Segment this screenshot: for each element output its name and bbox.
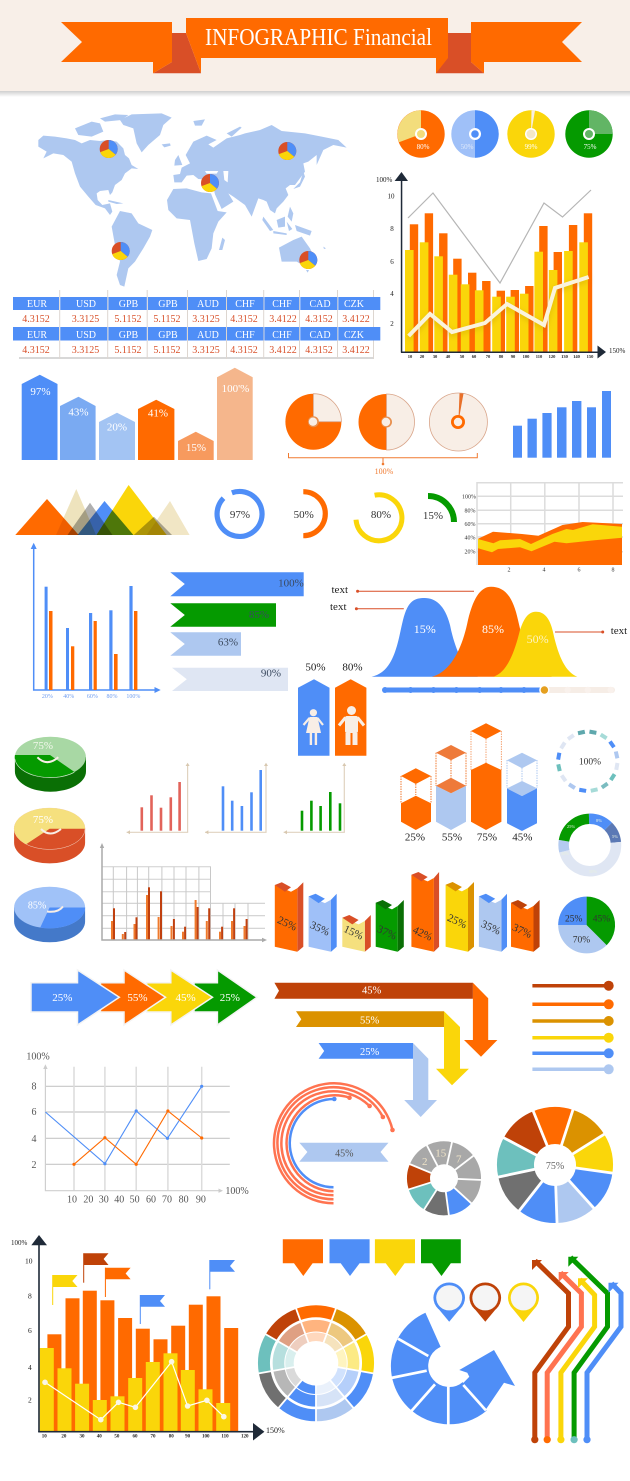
orange hump (432, 587, 552, 677)
arrow percentage columns (22, 368, 253, 460)
pie two (358, 394, 414, 450)
map pie: Asia (278, 142, 296, 160)
currency table (13, 290, 380, 359)
column 100%: 100'% (222, 383, 249, 395)
small segmented wheel (407, 1141, 482, 1216)
flag yellow (52, 1275, 78, 1305)
arrow green (194, 970, 257, 1025)
bell curves: 50% (527, 632, 549, 646)
area chart: 2 (508, 568, 510, 574)
hexagon columns (401, 723, 537, 844)
table data row 2: 4.3152 (22, 345, 50, 356)
table header row 2: USD (76, 330, 96, 341)
large segmented wheel (496, 1108, 614, 1225)
axis labels: 100% (376, 176, 392, 184)
flag orange (105, 1268, 131, 1297)
table data row 2: 3.4122 (269, 345, 297, 356)
axis labels (376, 176, 626, 355)
bar and line chart: 140 (573, 354, 581, 359)
column 15%: 15% (186, 442, 206, 454)
pie 99% (507, 110, 555, 158)
bottom bar chart with flags: 30 (80, 1434, 85, 1439)
bottom chart labels: 10 (25, 1256, 33, 1266)
pie 80%: 80% (417, 143, 430, 151)
table data row 1: 4.3152 (305, 314, 333, 325)
banner ribbon (61, 18, 582, 73)
area chart (462, 483, 623, 574)
3D pie red: 75% (33, 814, 53, 826)
pie 75% (565, 110, 613, 158)
bottom bar chart with flags: 60 (132, 1434, 138, 1439)
bottom bar chart with flags: 10 (42, 1434, 47, 1439)
donut chart: 10% (561, 851, 569, 856)
bar and line chart: 110 (536, 354, 543, 359)
table data row 1: 3.4122 (342, 314, 370, 325)
bottom chart labels: 2 (28, 1396, 32, 1404)
bell curves: 15% (414, 622, 436, 636)
ribbon 90%: 90% (261, 668, 281, 680)
line chart labels: 70 (162, 1194, 172, 1205)
table header row 2: GPB (119, 330, 139, 341)
bar and line chart: 90 (511, 354, 516, 359)
table data row 2: 5.1152 (153, 345, 181, 356)
line chart labels: 40 (114, 1194, 124, 1205)
legend lines with dots (532, 981, 614, 1074)
white trend line (409, 277, 589, 336)
flag dark red (83, 1253, 108, 1283)
line chart labels: 8 (32, 1082, 36, 1092)
table data row 2: 4.3152 (305, 345, 333, 356)
bottom bar chart with flags: 90 (185, 1434, 191, 1439)
column 55%: 55% (442, 832, 462, 844)
table data row 1: 3.3125 (72, 314, 99, 325)
line chart labels: 100% (225, 1186, 249, 1197)
area chart labels (462, 494, 476, 556)
gender tags (298, 662, 366, 756)
dashed ring 100%: 100% (579, 758, 601, 768)
table header row 2: CHF (235, 330, 255, 341)
small pie chart (558, 897, 615, 953)
top percent pies (397, 110, 613, 158)
bracket (288, 453, 477, 464)
wheel numbers: 15 (435, 1148, 447, 1160)
table data row 1: 3.3125 (192, 314, 220, 325)
column 97%: 97% (30, 386, 51, 398)
grid chart bars (111, 895, 246, 940)
bar and line chart: 150 (587, 354, 594, 359)
3D pie blue: 85% (28, 901, 46, 912)
bent arrow 55%: 55% (360, 1016, 379, 1026)
column 97% (22, 375, 58, 460)
table data row 2 (22, 345, 370, 356)
area chart: 8 (612, 568, 614, 574)
table header row 2: AUD (197, 330, 219, 341)
bottom bar chart with flags: 80 (169, 1434, 174, 1439)
small bar chart green (284, 763, 346, 834)
line chart (26, 1051, 249, 1205)
small bar chart red (127, 763, 190, 834)
area chart: 4 (542, 568, 546, 574)
world map (38, 113, 347, 287)
line chart labels: 80 (179, 1194, 189, 1205)
bottom chart labels: 150% (266, 1426, 285, 1435)
map pie: South America (112, 242, 130, 260)
table header row 1 (13, 297, 380, 310)
folded column 7: 35% (479, 918, 502, 938)
route orange (544, 1272, 581, 1443)
bent arrow 45%: 45% (362, 986, 381, 996)
axis labels: 10 (388, 192, 395, 200)
column 43%: 43% (68, 406, 89, 418)
bottom chart labels (11, 1239, 285, 1435)
wheel numbers (422, 1148, 462, 1168)
callout labels: text (332, 584, 348, 596)
bar labels: 100% (126, 694, 140, 700)
arrow head (459, 1350, 515, 1409)
callout labels: text (330, 601, 346, 613)
folded column 5: 42% (411, 924, 434, 944)
pin dark red (470, 1282, 501, 1322)
wheel numbers: 7 (456, 1154, 462, 1166)
bottom bar chart with flags: 120 (241, 1434, 249, 1439)
orange bars (410, 213, 592, 352)
axis labels: 8 (390, 225, 394, 233)
routed arrows (531, 1257, 621, 1443)
table data row 1: 4.3152 (230, 314, 258, 325)
grid bar chart (100, 843, 267, 942)
flag blue right (209, 1260, 235, 1289)
bar labels: 40% (63, 694, 74, 700)
folded column 5 (411, 872, 439, 952)
map pie: Australia (299, 251, 317, 269)
map pie: North America (100, 140, 118, 158)
callout tags (283, 1239, 461, 1276)
route blue (583, 1283, 621, 1443)
bottom orange bars (47, 1291, 238, 1432)
grouped bar chart (31, 543, 161, 700)
small pie chart: 70% (573, 936, 590, 946)
bar and line chart: 30 (433, 354, 438, 359)
folded column 4 (375, 900, 404, 952)
orange area (478, 522, 622, 565)
bottom bar chart with flags: 40 (97, 1434, 102, 1439)
flag blue (140, 1295, 165, 1324)
route dark red (531, 1260, 568, 1443)
ring 15% (423, 496, 454, 522)
bar and line chart: 60 (472, 354, 477, 359)
folded column 7 (479, 894, 507, 952)
folded column 6: 25% (445, 912, 469, 931)
folded column 1 (275, 882, 303, 952)
ring 97%: 97% (230, 509, 250, 521)
pie one (285, 394, 341, 450)
overlapping triangles (15, 485, 190, 535)
outer ring (243, 1290, 389, 1437)
table header row 2: EUR (27, 330, 47, 341)
table header row 1: CHF (235, 299, 255, 310)
area chart: 6 (578, 568, 580, 574)
column 41% (138, 400, 174, 460)
line chart labels (26, 1051, 249, 1205)
slider (382, 685, 614, 695)
area chart labels: 40% (464, 536, 476, 542)
ring 80%: 80% (371, 509, 391, 521)
folded column 8: 37% (510, 922, 534, 941)
axis labels: 4 (390, 290, 394, 298)
line chart labels: 6 (32, 1107, 36, 1118)
ribbon 85%: 85% (249, 609, 269, 621)
folded column 4: 37% (375, 923, 398, 943)
line chart labels: 50 (130, 1194, 140, 1205)
callout labels (330, 584, 627, 637)
female tag: 50% (305, 662, 325, 674)
arrow labels: 55% (127, 992, 147, 1004)
bar and line chart (376, 172, 626, 359)
folded column 3 (342, 915, 371, 952)
bar and line chart: 80 (499, 354, 504, 359)
ring 50% (294, 492, 325, 536)
bar labels: 20% (42, 694, 53, 700)
column 20%: 20% (107, 422, 127, 434)
yellow hump (493, 612, 577, 677)
concentric arcs (274, 1083, 395, 1203)
wheel numbers: 2 (422, 1156, 427, 1168)
arrow yellow (147, 970, 212, 1025)
table data row 1: 5.1152 (153, 314, 181, 325)
pie 75%: 75% (584, 143, 597, 151)
dashed ring 100% (556, 730, 619, 793)
bent arrow 25%: 25% (360, 1047, 379, 1058)
table data row 2: 3.4122 (342, 345, 370, 356)
arrow blue (31, 970, 119, 1025)
column 43% (60, 397, 96, 460)
pie 99%: 99% (525, 143, 538, 151)
line chart labels: 10 (67, 1194, 77, 1205)
bar and line chart: 10 (408, 354, 413, 359)
bell curves: 85% (482, 622, 504, 636)
arrow labels: 45% (176, 992, 196, 1004)
bottom white line (42, 1359, 227, 1422)
blue hump (372, 598, 478, 677)
table data row 1: 5.1152 (114, 314, 142, 325)
route green (568, 1257, 608, 1443)
column 75%: 75% (477, 832, 497, 844)
line chart labels: 2 (32, 1160, 36, 1171)
small pie chart: 45% (593, 915, 610, 925)
grid chart axes (102, 846, 263, 940)
chained arrows (31, 970, 257, 1025)
callout lines (356, 591, 603, 632)
column 25%: 25% (405, 832, 425, 844)
bottom chart axes (31, 1235, 264, 1440)
table header row 2: CAD (309, 330, 331, 341)
yellow area (478, 524, 622, 552)
bottom bar chart with flags: 50 (114, 1434, 120, 1439)
bar and line chart: 100 (523, 354, 530, 359)
bent ribbon arrows (274, 983, 497, 1117)
orange series (72, 1109, 203, 1166)
bottom chart labels: 6 (28, 1326, 32, 1335)
ribbon 100%: 100% (278, 578, 304, 590)
table header row 2: GPB (158, 330, 178, 341)
middle ring (263, 1310, 369, 1416)
folded column 2 (308, 894, 337, 952)
large segmented wheel: 75% (546, 1161, 564, 1172)
ring 80% (356, 495, 402, 541)
blue bar chart (513, 391, 611, 458)
pie 50% (451, 110, 499, 158)
table header row 1: CHF (272, 299, 292, 310)
chevron ribbons (170, 572, 304, 691)
folded column 1: 25% (275, 914, 299, 934)
column 41%: 41% (148, 408, 168, 420)
table header row 1: CZK (344, 299, 365, 310)
column 20% (99, 413, 135, 460)
table header row 2 (13, 327, 380, 341)
area chart labels: 60% (464, 522, 476, 528)
blue series (45, 1085, 203, 1165)
bottom bar chart with flags: 20 (61, 1434, 67, 1439)
table header row 2: CHF (272, 330, 292, 341)
pin yellow (508, 1282, 539, 1322)
donut chart: 25% (567, 824, 575, 829)
table data row 2: 3.3125 (72, 345, 99, 356)
bar labels: 60% (87, 694, 98, 700)
donut chart: 50% (589, 869, 597, 874)
pie 50%: 50% (461, 143, 474, 151)
arc banner: 45% (335, 1149, 353, 1160)
map pie: Middle East (201, 174, 219, 192)
table data row 1 (22, 314, 370, 325)
donut chart: 5% (612, 834, 618, 839)
3D pie blue (14, 887, 85, 942)
folded column 3: 15% (342, 923, 365, 943)
bar and line chart: 120 (549, 354, 556, 359)
title: INFOGRAPHIC Financial (205, 25, 432, 51)
table data row 2: 5.1152 (114, 345, 142, 356)
line chart labels: 60 (146, 1194, 156, 1205)
line chart labels: 20 (83, 1194, 93, 1205)
table data row 1: 3.4122 (269, 314, 297, 325)
arrow labels: 25% (52, 992, 72, 1004)
table header row 1: USD (76, 299, 96, 310)
bottom bar chart with flags (11, 1235, 285, 1440)
axis labels: 150% (609, 347, 626, 355)
bar and line chart: 130 (561, 354, 569, 359)
column 100% (217, 368, 253, 460)
bar and line chart: 40 (446, 354, 451, 359)
line chart labels: 100% (26, 1051, 50, 1062)
gray trend line (408, 190, 591, 283)
table data row 2: 3.3125 (192, 345, 220, 356)
arrow orange (100, 970, 166, 1025)
bottom bar chart with flags: 110 (221, 1434, 229, 1439)
bar and line chart: 20 (420, 354, 425, 359)
three orange pies with bracket (285, 393, 487, 476)
bottom bar chart with flags: 70 (150, 1434, 156, 1439)
male tag: 80% (342, 662, 362, 674)
table header row 1: AUD (197, 299, 219, 310)
area chart labels: 80% (464, 508, 476, 514)
table header row 2: CZK (344, 330, 365, 341)
header band (0, 0, 630, 97)
ring 15%: 15% (423, 510, 443, 522)
area chart labels: 100% (462, 494, 476, 500)
route yellow (557, 1278, 595, 1443)
pin blue (433, 1282, 465, 1322)
bar labels (42, 694, 140, 700)
table data row 2: 4.3152 (230, 345, 258, 356)
line chart labels: 90 (196, 1194, 206, 1205)
progress rings (217, 491, 454, 541)
table data row 1: 4.3152 (22, 314, 50, 325)
line chart labels: 30 (99, 1194, 109, 1205)
axis labels: 2 (390, 320, 394, 328)
arrow labels (52, 992, 240, 1004)
table header row 1: EUR (27, 299, 47, 310)
pie three (429, 393, 487, 451)
bottom bar chart with flags: 100 (202, 1434, 210, 1439)
donut chart (561, 818, 618, 874)
map pins (433, 1282, 539, 1322)
bar and line chart: 50 (460, 354, 465, 359)
bent arrow 25% (319, 1043, 437, 1117)
table header row 1: CAD (309, 299, 331, 310)
small pie chart: 25% (565, 915, 582, 925)
bent arrow 45% (274, 983, 497, 1057)
3D pie red (14, 808, 85, 863)
3D folded columns (275, 872, 540, 952)
arrow labels: 25% (220, 992, 240, 1004)
3D pie green (15, 737, 86, 792)
bottom chart labels: 8 (28, 1292, 32, 1300)
pie 80% (397, 110, 445, 158)
bar and line chart: 70 (486, 354, 491, 359)
bottom yellow bars (40, 1348, 230, 1432)
3D pie green: 75% (33, 740, 53, 752)
line chart labels: 4 (32, 1134, 36, 1145)
ring 50%: 50% (294, 509, 314, 521)
bell curves (330, 584, 627, 677)
yellow bars (405, 242, 588, 352)
ring 97% (217, 491, 262, 536)
folded column 8 (510, 900, 540, 952)
callout labels: text (611, 625, 627, 637)
circular arrow (391, 1310, 515, 1426)
bar labels: 80% (106, 694, 118, 700)
axes (395, 172, 606, 358)
folded column 6 (445, 882, 474, 952)
axis labels: 6 (390, 258, 394, 266)
table header row 1: GPB (158, 299, 178, 310)
bracket label: 100% (375, 467, 394, 476)
donut chart: 8% (596, 818, 602, 823)
column 45%: 45% (512, 832, 532, 844)
bottom chart labels: 4 (28, 1363, 32, 1372)
table header row 1: GPB (119, 299, 139, 310)
bent arrow 55% (296, 1011, 469, 1085)
segmented colour circle (243, 1290, 389, 1437)
bottom chart labels: 100% (11, 1239, 28, 1247)
column 15% (178, 432, 214, 460)
folded column 2: 35% (308, 919, 331, 939)
small bar chart blue (205, 763, 268, 834)
inner ring (279, 1326, 353, 1401)
ribbon 63%: 63% (218, 637, 238, 649)
area chart labels: 20% (464, 550, 476, 556)
